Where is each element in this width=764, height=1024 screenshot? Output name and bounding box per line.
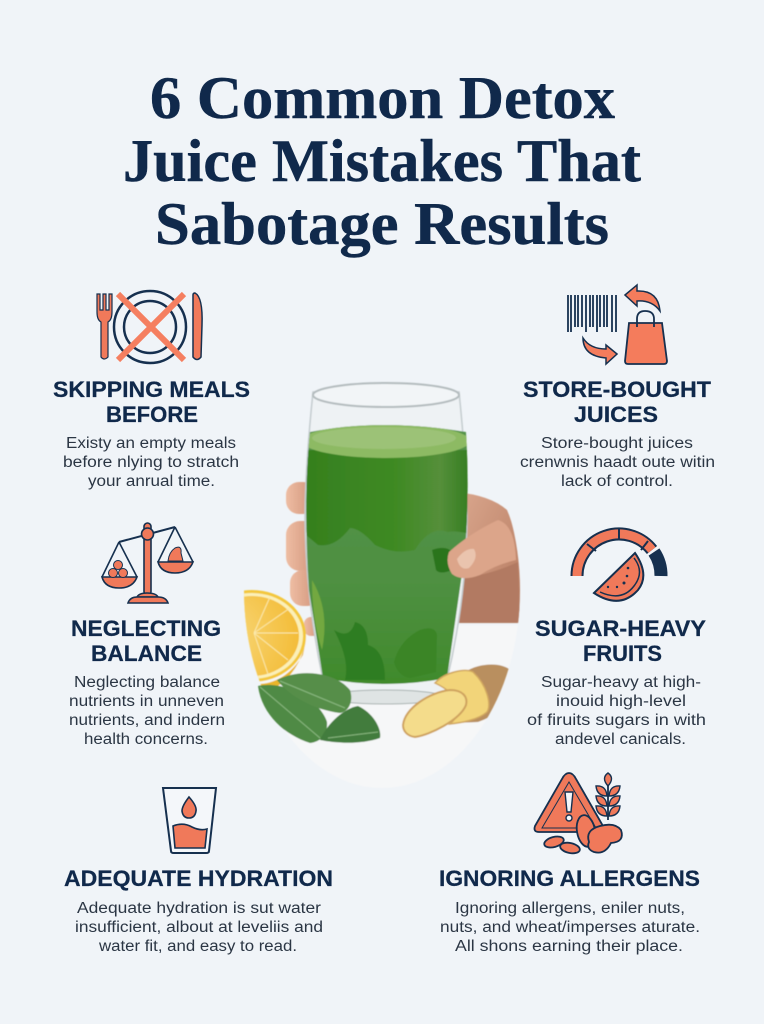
- body text: Ignoring allergens, eniler nuts,: [455, 900, 685, 917]
- icon: barcode, bag and arrows: [568, 285, 667, 364]
- title: Juice Mistakes That: [123, 128, 641, 194]
- panel: sugar-heavy fruits: [527, 529, 706, 748]
- spinach leaves: [258, 673, 380, 743]
- panel: ignoring allergens: [439, 773, 700, 955]
- heading: [535, 616, 706, 666]
- body text: [63, 435, 239, 490]
- body text: Store-bought juices: [541, 435, 693, 452]
- body text: health concerns.: [84, 731, 208, 748]
- body text: andevel canicals.: [555, 731, 686, 748]
- body text: All shons earning their place.: [455, 938, 683, 955]
- heading: ADEQUATE HYDRATION: [64, 866, 333, 891]
- heading: SUGAR-HEAVY: [535, 616, 706, 641]
- body text: Sugar-heavy at high-: [541, 674, 701, 691]
- body text: [69, 674, 225, 748]
- body text: [75, 900, 323, 955]
- body text: Neglecting balance: [74, 674, 220, 691]
- body text: nutrients in unneven: [69, 693, 224, 710]
- icon: warning triangle with nuts and wheat: [534, 773, 622, 855]
- leaf shadows inside juice: [334, 622, 385, 680]
- icon: balance scale: [102, 523, 193, 603]
- lemon half: [243, 589, 307, 686]
- heading: IGNORING ALLERGENS: [439, 866, 700, 891]
- body text: [520, 435, 715, 490]
- heading: BALANCE: [91, 641, 202, 666]
- heading: BEFORE: [106, 402, 198, 427]
- juice: [300, 420, 475, 690]
- body text: [440, 900, 700, 955]
- icon: water glass with drop: [163, 788, 216, 853]
- panel: neglecting balance: [69, 523, 225, 748]
- body text: crenwnis haadt oute witin: [520, 454, 715, 471]
- heading: STORE-BOUGHT: [523, 377, 712, 402]
- thumb: [448, 520, 516, 578]
- body text: inouid high-level: [556, 693, 686, 710]
- body text: before nlying to stratch: [63, 454, 239, 471]
- heading: FRUITS: [583, 641, 662, 666]
- table and hand background: [260, 493, 521, 744]
- heading: [523, 377, 712, 427]
- panel: skipping meals: [53, 291, 250, 490]
- body text: nutrients, and indern: [69, 712, 225, 729]
- panel: store-bought juices: [520, 285, 715, 490]
- glass: [305, 383, 467, 704]
- ginger: [403, 664, 512, 737]
- heading: SKIPPING MEALS: [53, 377, 250, 402]
- icon: crossed-out plate and cutlery: [97, 291, 202, 363]
- body text: insufficient, albout at leveliis and: [75, 919, 323, 936]
- central photo: green juice with hand and ingredients: [243, 382, 521, 744]
- heading: [71, 616, 221, 666]
- body text: nuts, and wheat/imperses aturate.: [440, 919, 700, 936]
- title: [123, 65, 641, 257]
- body text: your anrual time.: [88, 473, 215, 490]
- title: 6 Common Detox: [150, 65, 615, 131]
- body text: water fit, and easy to read.: [98, 938, 297, 955]
- heading: JUICES: [574, 402, 658, 427]
- body text: [527, 674, 706, 748]
- heading: [53, 377, 250, 427]
- panel: adequate hydration: [64, 788, 333, 955]
- body text: lack of control.: [561, 473, 673, 490]
- icon: sugar gauge with watermelon slice: [577, 529, 661, 601]
- body text: of firuits sugars in with: [527, 712, 706, 729]
- title: Sabotage Results: [155, 191, 609, 257]
- left fingers: [286, 482, 320, 636]
- body text: Existy an empty meals: [66, 435, 236, 452]
- body text: Adequate hydration is sut water: [77, 900, 321, 917]
- heading: NEGLECTING: [71, 616, 221, 641]
